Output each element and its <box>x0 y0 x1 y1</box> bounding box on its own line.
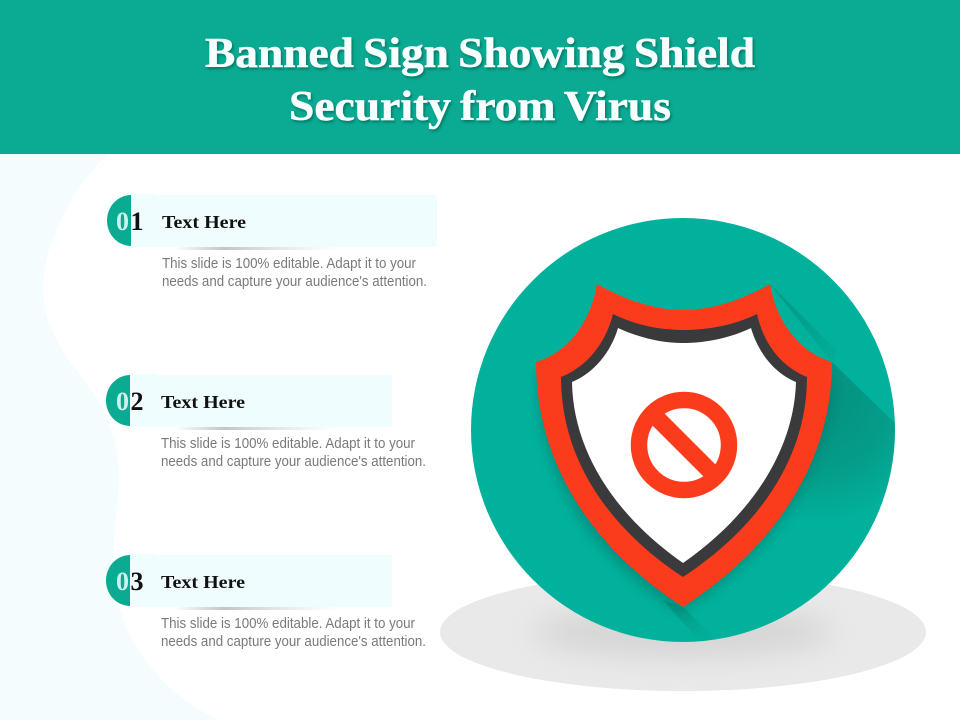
item 2 number badge: 0 <box>116 387 129 416</box>
title <box>205 31 755 130</box>
item 1 description: This slide is 100% editable. Adapt it to your <box>162 255 416 272</box>
item 1 <box>107 194 437 290</box>
title: Banned Sign Showing Shield <box>205 31 755 77</box>
item 1 number badge: 1 <box>130 207 144 236</box>
item 3 <box>106 554 426 650</box>
title: Security from Virus <box>289 84 671 130</box>
item 3 number badge: 0 <box>116 567 129 596</box>
shield white face <box>572 328 796 563</box>
item 1 description: needs and capture your audience's attention. <box>162 273 427 290</box>
ground shadow ellipse <box>440 573 926 691</box>
teal circle <box>471 218 895 642</box>
item 2 description: This slide is 100% editable. Adapt it to your <box>161 435 415 452</box>
item 3 heading: Text Here <box>161 572 245 592</box>
shield emblem in teal circle <box>471 218 900 645</box>
long shadow <box>539 284 900 645</box>
item 2 number badge <box>106 374 156 427</box>
item 3 number badge: 3 <box>130 567 144 596</box>
item 3 number badge <box>106 554 156 607</box>
item 1 number badge <box>107 194 157 247</box>
shield red rim <box>536 284 832 607</box>
shield <box>536 284 832 607</box>
icon: banned sign <box>639 400 729 490</box>
item 2 band <box>130 375 392 427</box>
item 3 description: needs and capture your audience's attention. <box>161 633 426 650</box>
shield dark band <box>561 314 807 577</box>
item 1 band <box>131 195 437 247</box>
item 2 description: needs and capture your audience's attention. <box>161 453 426 470</box>
item 2 heading: Text Here <box>161 392 245 412</box>
item 3 band <box>130 555 392 607</box>
item 2 number badge: 2 <box>130 387 144 416</box>
header band <box>0 0 960 154</box>
item 1 number badge: 0 <box>116 207 129 236</box>
item 2 <box>106 374 426 470</box>
background wave panel <box>0 154 220 720</box>
item 3 description: This slide is 100% editable. Adapt it to your <box>161 615 415 632</box>
item 1 heading: Text Here <box>162 212 246 232</box>
